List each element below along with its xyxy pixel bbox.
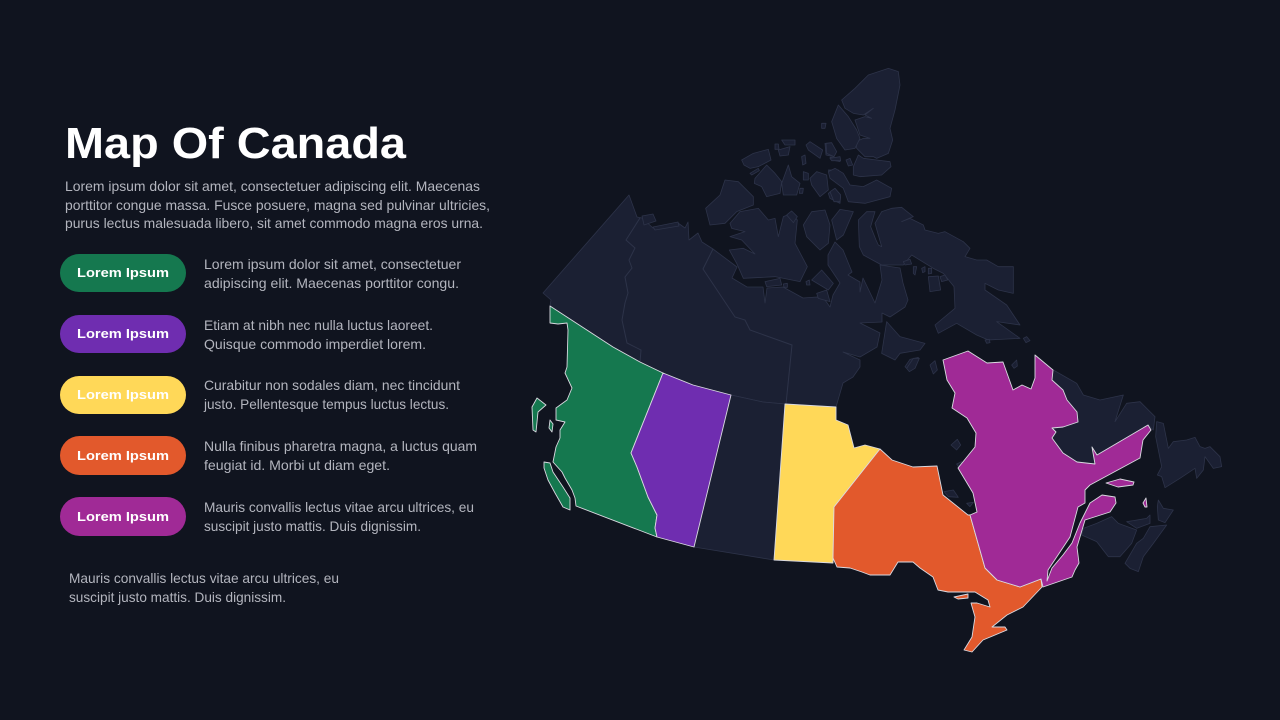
legend row: Ontario orange: Nulla finibus pharetra magna, a luctus quam	[204, 438, 477, 454]
legend row: British Columbia green	[60, 254, 461, 292]
province: Ontario	[833, 449, 1042, 652]
Victoria Island and central Arctic islands	[729, 208, 833, 302]
territorial borders	[622, 218, 792, 404]
Atlantic provinces	[1082, 422, 1222, 572]
Labrador and James Bay islands	[907, 358, 1155, 507]
intro paragraph: Lorem ipsum dolor sit amet, consectetuer adipiscing elit. Maecenas	[65, 178, 480, 194]
Baffin Island group	[858, 207, 1030, 343]
legend row: Ontario orange: feugiat id. Morbi ut diam eget.	[204, 457, 390, 473]
Queen Elizabeth Islands	[706, 140, 853, 250]
legend row: Ontario orange	[60, 436, 477, 475]
legend row: Quebec magenta: suscipit justo mattis. Duis dignissim.	[204, 518, 421, 534]
Saskatchewan	[694, 395, 785, 560]
northern mainland: Yukon, Northwest Territories, Nunavut	[543, 195, 908, 407]
footnote text: Mauris convallis lectus vitae arcu ultrices, eu	[69, 570, 339, 586]
footnote text	[69, 570, 339, 605]
legend row: Quebec magenta	[60, 497, 474, 536]
legend row: British Columbia green: adipiscing elit. Maecenas porttitor congu.	[204, 275, 459, 291]
legend row: Quebec magenta: Lorem Ipsum	[77, 509, 169, 524]
Ellesmere, Axel Heiberg and Devon islands	[822, 68, 900, 203]
province: Quebec	[943, 351, 1151, 587]
province: Manitoba	[774, 404, 880, 563]
intro paragraph	[65, 178, 490, 231]
legend row: British Columbia green: Lorem Ipsum	[77, 265, 169, 280]
Hudson Bay islands	[882, 322, 925, 370]
legend row: Alberta purple: Lorem Ipsum	[77, 326, 169, 341]
province: Alberta	[631, 373, 731, 547]
legend row: Manitoba yellow: Curabitur non sodales diam, nec tincidunt	[204, 377, 460, 393]
title: Map Of Canada	[65, 119, 407, 168]
legend row: Alberta purple: Quisque commodo imperdiet lorem.	[204, 336, 426, 352]
legend row: Alberta purple	[60, 315, 433, 353]
legend row: Alberta purple: Etiam at nibh nec nulla luctus laoreet.	[204, 317, 433, 333]
legend row: Manitoba yellow: Lorem Ipsum	[77, 387, 169, 402]
legend row: Manitoba yellow: justo. Pellentesque tempus luctus lectus.	[203, 396, 449, 412]
footnote text: suscipit justo mattis. Duis dignissim.	[69, 589, 286, 605]
map of Canada	[532, 68, 1222, 652]
legend row: British Columbia green: Lorem ipsum dolor sit amet, consectetuer	[204, 256, 461, 272]
legend row: Quebec magenta: Mauris convallis lectus vitae arcu ultrices, eu	[204, 499, 474, 515]
legend row: Ontario orange: Lorem Ipsum	[77, 448, 169, 463]
province: British Columbia	[532, 306, 663, 537]
legend row: Manitoba yellow	[60, 376, 460, 414]
intro paragraph: porttitor congue massa. Fusce posuere, magna sed pulvinar ultricies,	[65, 197, 490, 213]
intro paragraph: purus lectus malesuada libero, sit amet commodo magna eros urna.	[65, 215, 483, 231]
